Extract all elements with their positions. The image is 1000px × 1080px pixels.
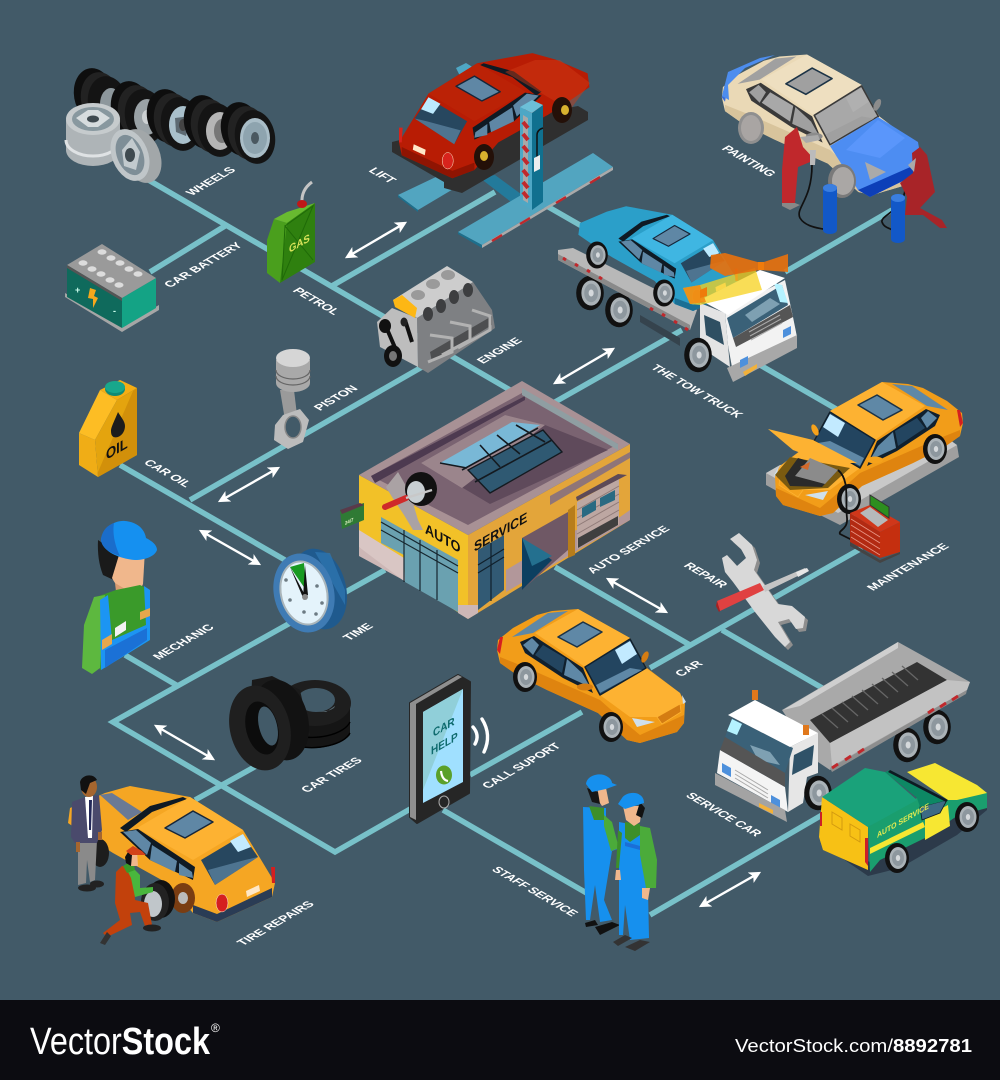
sign text: AUTO — [425, 521, 461, 557]
flow lines — [113, 178, 892, 915]
logo wheel and tools — [385, 472, 437, 530]
raised bonnet — [768, 429, 857, 463]
icon: smartphone: HELP — [431, 731, 458, 758]
labels: SERVICE CAR — [682, 790, 766, 839]
labels: CAR OIL — [140, 457, 195, 489]
registered mark: ® — [211, 1021, 220, 1035]
hanging sign — [340, 503, 364, 529]
painter right — [900, 147, 947, 228]
worker left — [583, 774, 620, 935]
painter left — [782, 127, 820, 210]
lift pillar — [520, 100, 543, 210]
labels: TIRE REPAIRS — [233, 899, 317, 948]
icon: petrol can: GAS — [289, 232, 310, 256]
tire repair car — [68, 775, 275, 945]
engine bay — [775, 457, 850, 490]
icon: smartphone — [410, 675, 488, 823]
lift — [392, 53, 613, 248]
yellow car with raised bonnet — [774, 382, 963, 516]
labels: MAINTENANCE — [863, 541, 952, 593]
worker right — [613, 793, 657, 951]
icon: repair tools — [716, 533, 809, 650]
cab — [700, 270, 797, 382]
labels: PAINTING — [718, 143, 779, 179]
icon: car battery: - — [113, 306, 116, 316]
icon: smartphone: CAR — [433, 715, 455, 740]
staff service — [583, 774, 657, 951]
icon: car battery — [65, 244, 159, 332]
labels: REPAIR — [680, 560, 731, 590]
icon: petrol can — [267, 182, 315, 283]
service van: AUTO SERVICE — [877, 801, 929, 840]
labels — [140, 143, 952, 948]
icon: clock — [265, 543, 355, 639]
skylight — [440, 422, 540, 468]
maintenance — [766, 382, 963, 563]
labels: CAR TIRES — [297, 755, 366, 795]
lift plates — [398, 63, 613, 248]
labels: PETROL — [289, 285, 344, 317]
labels: CAR BATTERY — [160, 240, 246, 290]
icon: engine — [377, 266, 495, 373]
tow truck — [558, 206, 797, 382]
hanging sign: 24/7 — [345, 517, 354, 527]
footer band — [0, 1000, 1000, 1080]
footer url: VectorStock.com/ 8892781 — [735, 1036, 972, 1056]
service van — [819, 763, 987, 876]
icon: painting car — [722, 54, 947, 243]
labels: CAR — [671, 658, 706, 679]
labels: PISTON — [310, 383, 361, 413]
paint tanks and hoses — [799, 165, 905, 243]
icon: oil can: OIL — [106, 435, 128, 464]
kneeling mechanic — [100, 846, 161, 945]
labels: CALL SUPORT — [478, 741, 565, 791]
arrows — [156, 223, 759, 906]
icon: mechanic — [82, 521, 157, 674]
footer logo: VectorStock — [30, 1021, 211, 1063]
labels: THE TOW TRUCK — [647, 362, 747, 420]
labels: MECHANIC — [149, 622, 218, 662]
icon: car tires — [220, 674, 351, 777]
labels: ENGINE — [473, 336, 525, 366]
removed wheel — [141, 880, 175, 921]
man in suit — [71, 775, 104, 892]
red car — [399, 53, 589, 178]
building walls — [359, 475, 468, 619]
icon: auto service building — [340, 381, 630, 619]
garage bay — [522, 512, 568, 590]
labels: WHEELS — [182, 165, 239, 198]
labels: STAFF SERVICE — [488, 864, 581, 918]
icon: auto service building: SERVICE — [474, 508, 527, 555]
icon: piston — [274, 349, 310, 449]
warning lights — [683, 253, 788, 305]
car platform — [392, 106, 588, 193]
platform — [766, 445, 959, 525]
side window — [478, 535, 504, 610]
roof — [359, 381, 630, 535]
labels: TIME — [339, 621, 376, 643]
service truck — [715, 642, 970, 822]
yellow car — [497, 609, 686, 743]
blue car on truck — [578, 206, 738, 311]
front window — [381, 517, 458, 612]
icon: oil can — [79, 380, 137, 477]
icon: wheels — [66, 65, 279, 189]
labels: LIFT — [365, 165, 400, 185]
labels: AUTO SERVICE — [583, 524, 673, 576]
diagnostic cart — [838, 470, 900, 563]
icon: car battery: + — [75, 285, 80, 295]
